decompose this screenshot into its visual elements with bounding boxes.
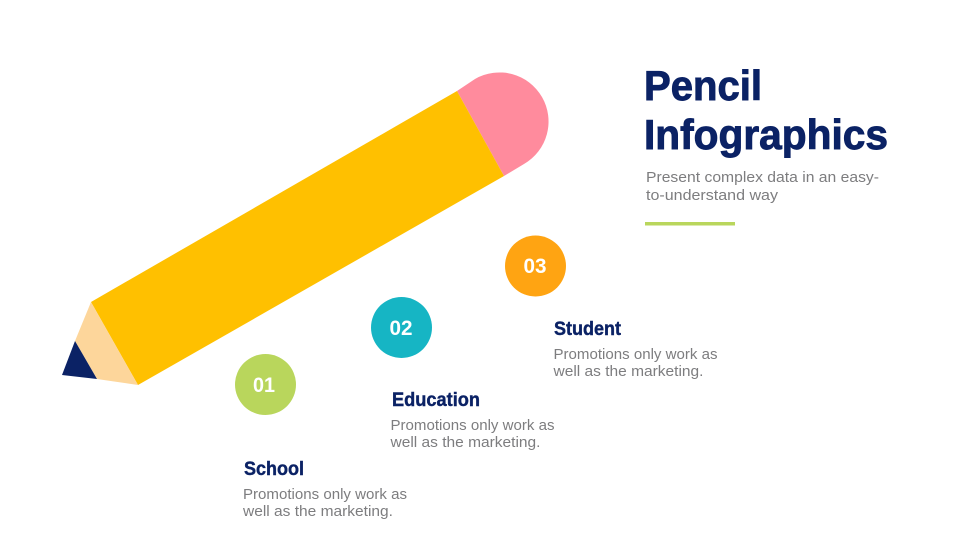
step 02 badge: 02 [390,317,412,340]
step 02 badge [371,297,432,358]
step 03 badge: 03 [524,255,546,278]
step 03 text: Student [552,319,718,380]
step 01 text: School: well as the marketing. [242,503,393,520]
pencil wood tip [75,302,138,385]
subtitle: to-understand way [646,187,779,204]
pencil eraser [457,72,549,176]
step 02 text: Education: Promotions only work as [390,417,554,434]
step 01 badge [235,354,296,415]
step 02 text: Education: well as the marketing. [389,434,540,451]
icon: pencil [62,72,549,385]
subtitle [646,169,879,204]
title: Infographics [644,111,888,158]
step 02 text: Education [389,390,554,451]
title: Pencil [644,62,762,109]
pencil body [91,91,504,385]
subtitle: Present complex data in an easy- [646,169,879,186]
step 01 text: School [242,459,407,520]
title [644,62,888,158]
step 02 text: Education: Education [392,390,480,411]
pencil lead [62,341,97,379]
step 03 text: Student: well as the marketing. [552,363,704,380]
step 03 text: Student: Promotions only work as [554,346,718,363]
step 03 badge [505,236,566,296]
step 01 badge: 01 [253,374,275,397]
step 03 text: Student: Student [554,319,622,340]
step 01 text: School: School [244,459,304,480]
step 01 text: School: Promotions only work as [243,486,407,503]
accent underline [645,222,735,226]
